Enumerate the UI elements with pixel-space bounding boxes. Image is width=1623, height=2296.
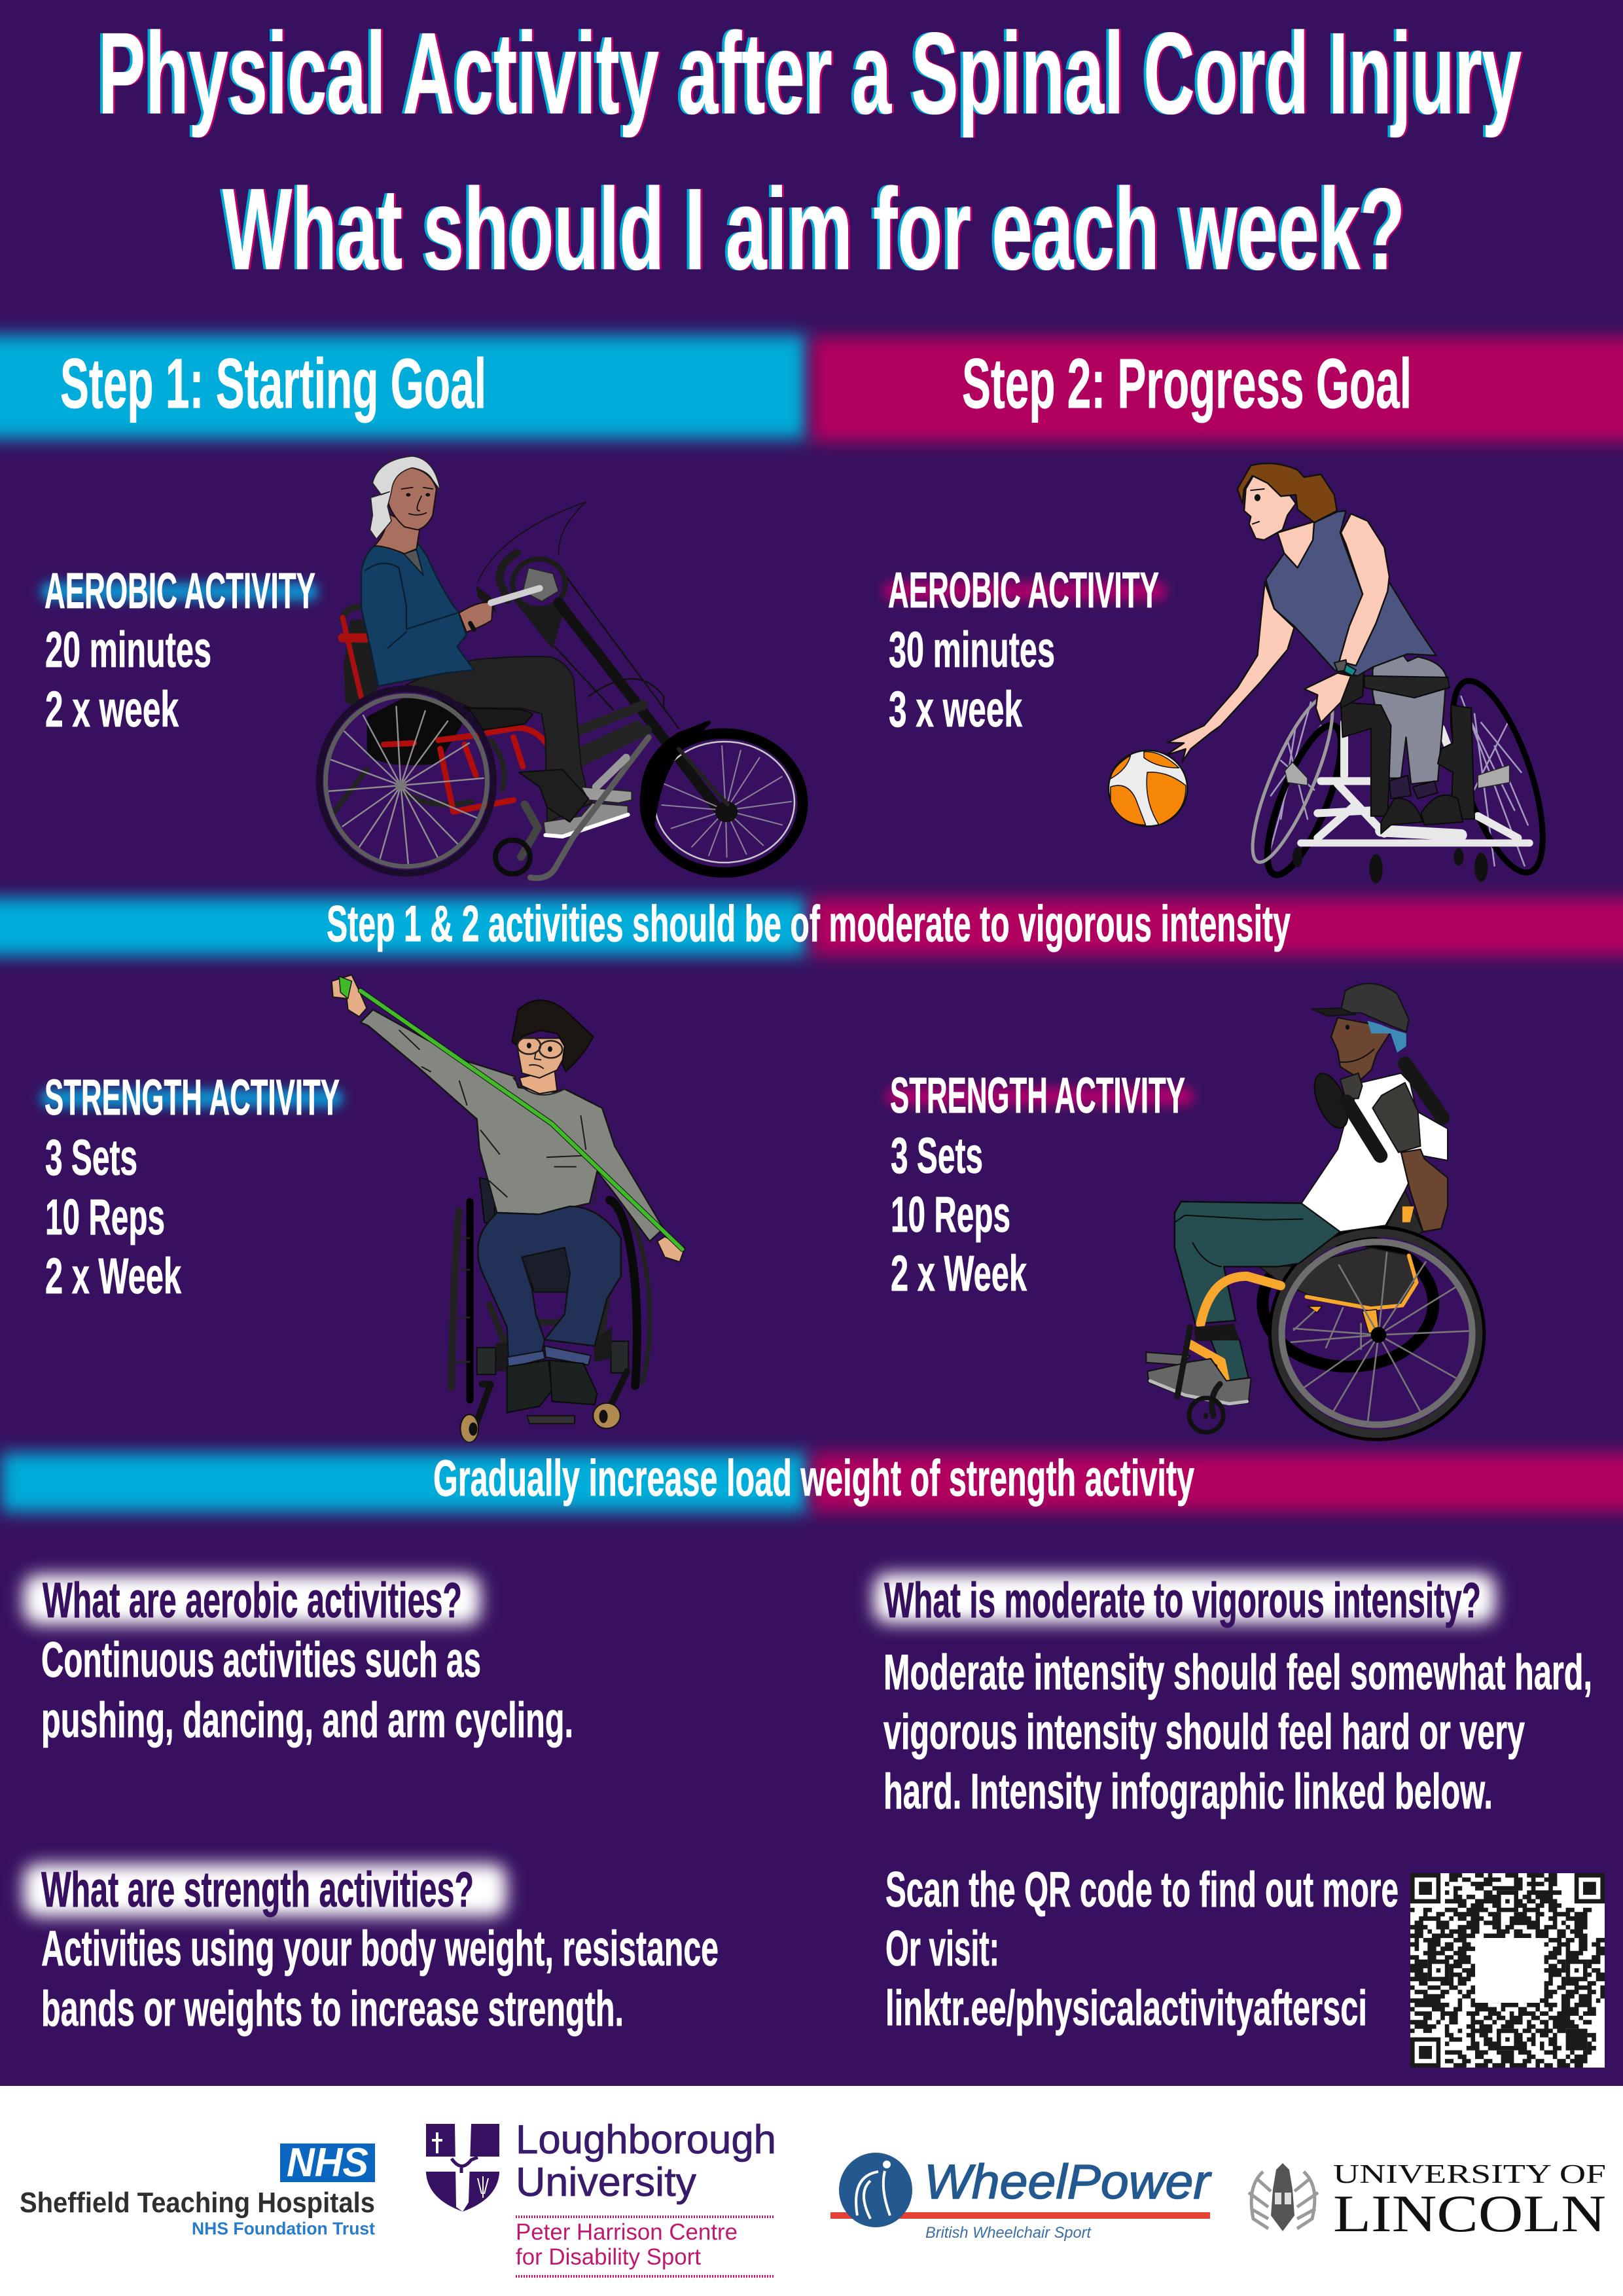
info: strength activities: What are strength activities? (41, 1862, 474, 1918)
scan the QR code text: linktr.ee/physicalactivityaftersci (885, 1981, 1367, 2036)
logo: Loughborough University: Loughborough (516, 2117, 776, 2162)
logo strip (0, 2086, 1623, 2296)
logo: Loughborough University: Peter Harrison Centre (516, 2219, 738, 2245)
illustration: resistance band (332, 975, 685, 1443)
header band: step 1 (0, 335, 806, 439)
info: aerobic activities: What are aerobic activities? (43, 1573, 462, 1628)
step 1 aerobic text (41, 563, 318, 738)
scan the QR code text (885, 1862, 1399, 2036)
info: aerobic activities: pushing, dancing, and arm cycling. (41, 1693, 573, 1748)
step 2 strength text: 3 Sets (891, 1128, 983, 1184)
step 2 aerobic text: AEROBIC ACTIVITY (888, 562, 1159, 619)
step 1 aerobic text: 20 minutes (45, 622, 211, 678)
header band: step 1: Step 1: Starting Goal (60, 344, 486, 423)
step 1 strength text: 3 Sets (45, 1130, 137, 1186)
strength band (1, 1449, 1623, 1512)
info: aerobic activities: Continuous activities such as (41, 1632, 481, 1688)
logo: Loughborough University (426, 2117, 776, 2276)
header band: step 2 (812, 337, 1623, 442)
logo: University of Lincoln: LINCOLN (1333, 2185, 1606, 2243)
step 1 strength text: 2 x Week (45, 1248, 181, 1304)
logo: Loughborough University: for Disability Sport (516, 2244, 701, 2270)
step 1 aerobic text: AEROBIC ACTIVITY (45, 563, 315, 619)
step 2 strength text: STRENGTH ACTIVITY (890, 1067, 1185, 1124)
info: strength activities (24, 1862, 719, 2037)
logo: WheelPower (830, 2153, 1212, 2242)
info: strength activities: bands or weights to increase strength. (41, 1981, 624, 2037)
logo: University of Lincoln: UNIVERSITY OF (1333, 2159, 1606, 2189)
logo: WheelPower: WheelPower (924, 2155, 1212, 2209)
step 2 strength text: 10 Reps (891, 1187, 1010, 1243)
strength band: Gradually increase load weight of strength activity (433, 1449, 1194, 1507)
scan the QR code text: Or visit: (885, 1921, 999, 1977)
step 2 aerobic text (883, 562, 1166, 738)
illustration: dumbbell press (1146, 984, 1484, 1439)
step 1 strength text: 10 Reps (45, 1189, 165, 1246)
QR code (1410, 1873, 1613, 2068)
step 2 aerobic text: 30 minutes (889, 622, 1055, 678)
step 2 aerobic text: 3 x week (889, 681, 1022, 738)
title (98, 9, 1522, 294)
illustration: wheelchair basketball (1109, 463, 1561, 884)
info: moderate to vigorous intensity (874, 1573, 1592, 1820)
illustration: arm cycling handcycle (319, 456, 803, 878)
step 1 aerobic text: 2 x week (45, 681, 179, 738)
step 2 strength text: 2 x Week (891, 1246, 1027, 1302)
logo: Sheffield Teaching Hospitals NHS: NHS Foundation Trust (192, 2219, 375, 2238)
step 2 strength text (886, 1067, 1194, 1302)
logo: Loughborough University: University (516, 2160, 696, 2205)
logo: Sheffield Teaching Hospitals NHS: Sheffield Teaching Hospitals (20, 2187, 375, 2219)
logo: University of Lincoln (1249, 2159, 1606, 2243)
logo: WheelPower: British Wheelchair Sport (925, 2224, 1092, 2242)
info: aerobic activities (24, 1573, 573, 1748)
logo: Sheffield Teaching Hospitals NHS: NHS (287, 2140, 368, 2185)
step 1 strength text: STRENGTH ACTIVITY (45, 1069, 340, 1126)
logo: Sheffield Teaching Hospitals NHS (20, 2140, 375, 2238)
step 1 strength text (41, 1069, 343, 1304)
info: strength activities: Activities using your body weight, resistance (41, 1921, 719, 1977)
